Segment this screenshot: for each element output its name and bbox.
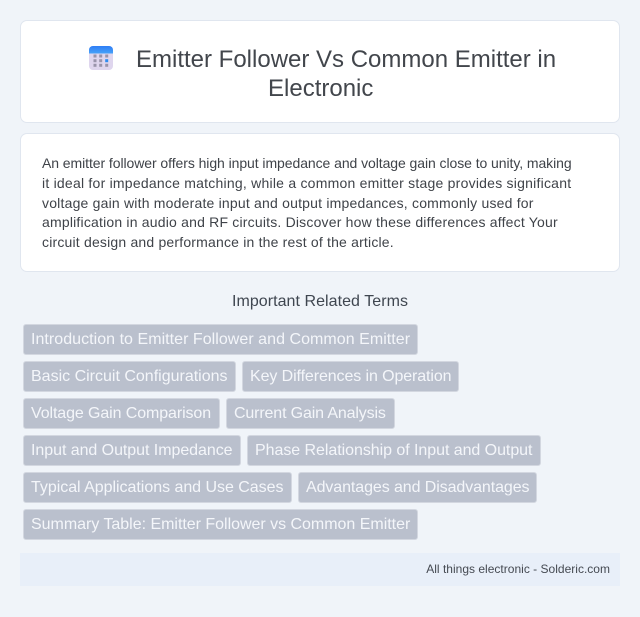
tag: Current Gain Analysis: [234, 405, 386, 422]
tag: Phase Relationship of Input and Output: [255, 442, 532, 459]
panel: intro text card: [20, 133, 620, 272]
tag: Typical Applications and Use Cases: [31, 479, 283, 496]
tag list: [23, 324, 541, 540]
tag: [23, 509, 418, 540]
footer bar: [20, 553, 620, 586]
heading: important related terms: Important Related Terms: [232, 293, 408, 310]
text block: intro paragraph: it ideal for impedance matching, while a common emitter stage provides significant: [42, 175, 571, 191]
tag: Basic Circuit Configurations: [31, 368, 228, 385]
tag: [23, 398, 220, 428]
text block: intro paragraph: voltage gain with moderate input and output impedances, commonly used for: [42, 195, 534, 211]
tag: Voltage Gain Comparison: [31, 405, 211, 422]
tag: [23, 472, 292, 502]
tag: Input and Output Impedance: [31, 442, 233, 459]
tag: [298, 472, 536, 502]
tag: [247, 435, 540, 466]
text block: intro paragraph: An emitter follower offers high input impedance and voltage gain close to unity, making: [42, 155, 572, 171]
tag: Summary Table: Emitter Follower vs Common Emitter: [31, 516, 410, 533]
text block: intro paragraph: [42, 155, 572, 250]
tag: Introduction to Emitter Follower and Common Emitter: [31, 331, 410, 348]
footer text: All things electronic - Solderic.com: [426, 562, 610, 576]
title: Electronic: [268, 75, 373, 102]
title: Emitter Follower Vs Common Emitter in: [136, 46, 556, 73]
title: [136, 46, 556, 102]
tag: Key Differences in Operation: [250, 368, 451, 385]
tag: [226, 398, 395, 428]
tag: [23, 324, 418, 354]
tag: [23, 361, 236, 392]
panel: title card: [20, 20, 620, 123]
icon: calendar grid: [89, 46, 113, 70]
tag: [242, 361, 459, 392]
text block: intro paragraph: amplification in audio and RF circuits. Discover how these differences affect Your: [42, 214, 558, 230]
tag: Advantages and Disadvantages: [306, 479, 529, 496]
tag: [23, 435, 241, 466]
text block: intro paragraph: circuit design and performance in the rest of the article.: [42, 234, 394, 250]
